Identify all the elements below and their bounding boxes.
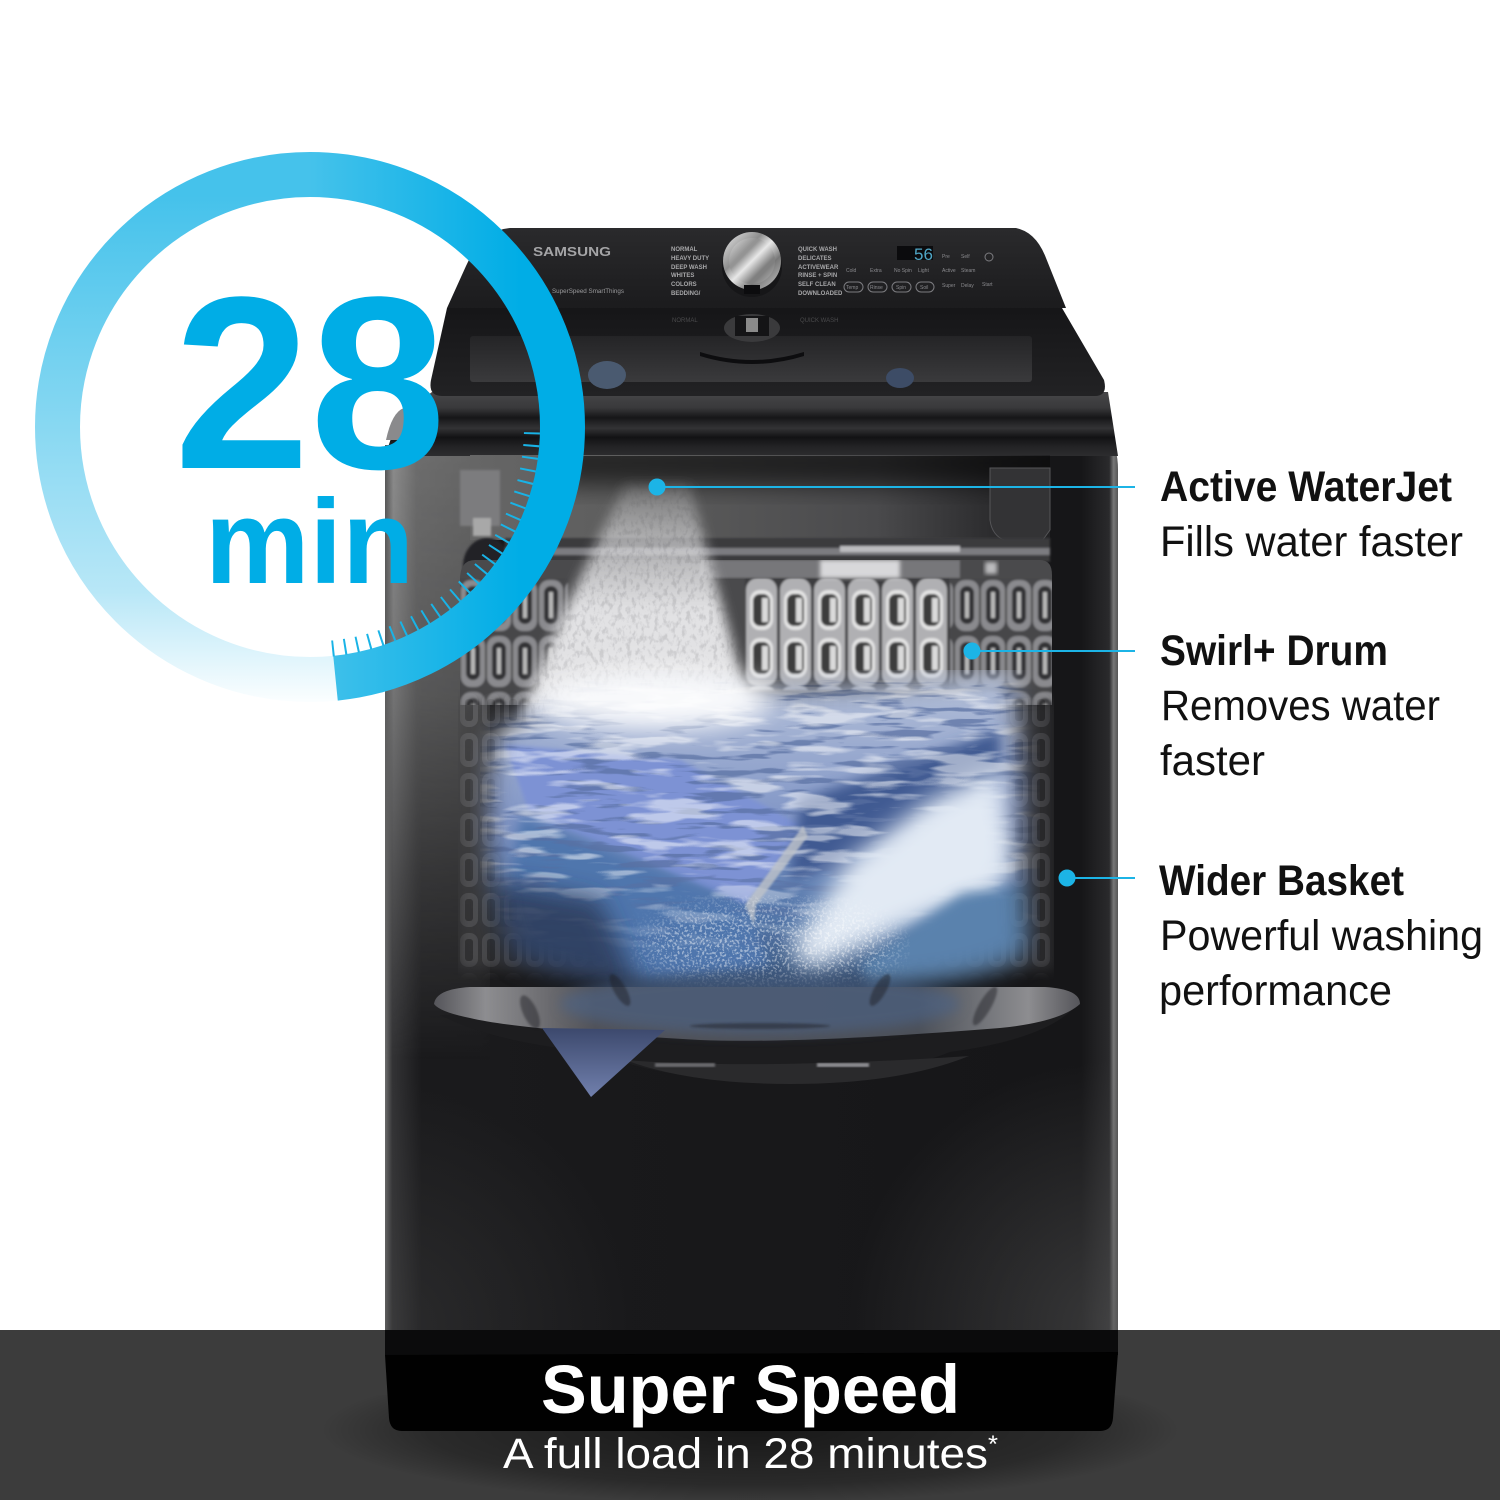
callout heading: Wider Basket — [1159, 857, 1404, 905]
surface highlight — [537, 670, 773, 730]
display: 56 — [914, 245, 933, 264]
option labels: Super — [942, 283, 956, 289]
pulsator vanes — [516, 971, 1001, 1031]
right cycle labels: DOWNLOADED — [798, 291, 843, 297]
option labels: Rinse — [870, 285, 883, 291]
right cycle labels: RINSE + SPIN — [798, 273, 837, 279]
drum rim — [505, 538, 1050, 562]
right cycle labels: ACTIVEWEAR — [798, 265, 839, 271]
option labels: Pre — [942, 254, 950, 260]
option labels: Temp — [846, 285, 858, 291]
water mass — [470, 670, 1040, 1000]
callout pointer — [648, 478, 1135, 496]
left cycle labels: BEDDING/ — [671, 291, 701, 297]
option labels: Steam — [961, 268, 975, 274]
option buttons — [844, 253, 993, 292]
washing machine — [385, 228, 1118, 1431]
drum wall lower — [458, 690, 1054, 980]
bowl centre water — [560, 974, 960, 1034]
right cycle labels — [798, 247, 843, 297]
right cycle labels: QUICK WASH — [798, 247, 837, 253]
timer number: 28 — [174, 246, 446, 521]
cloth hem edge — [745, 826, 808, 925]
callout: Swirl+ Drum — [964, 627, 1440, 785]
lower left shadow — [490, 880, 640, 990]
option labels: Spin — [896, 285, 906, 291]
option labels: Extra — [870, 268, 882, 274]
glass lid: NORMAL — [672, 318, 698, 324]
option labels: Cold — [846, 268, 857, 274]
washer bowl pulsator — [434, 971, 1080, 1084]
callout: Active WaterJet — [648, 463, 1463, 566]
callout body: performance — [1159, 967, 1392, 1015]
timer ring — [58, 174, 562, 680]
tick marks — [332, 427, 532, 648]
bright cloth right — [790, 770, 1015, 970]
grey left panel — [385, 445, 490, 1008]
bottom banner band — [0, 1330, 1500, 1500]
callout pointer — [964, 642, 1135, 660]
machine body — [385, 440, 1118, 1431]
blue cloth fold — [505, 745, 806, 905]
right cycle labels: SELF CLEAN — [798, 282, 836, 288]
left cycle labels: DEEP WASH — [671, 265, 707, 271]
option labels: Delay — [961, 283, 974, 289]
right bracket — [990, 468, 1050, 541]
left cycle labels — [671, 247, 709, 297]
right cycle labels: DELICATES — [798, 256, 832, 262]
water spray — [516, 481, 749, 724]
callout: Wider Basket — [1058, 857, 1483, 1015]
glass lid — [430, 308, 1105, 396]
left cycle labels: COLORS — [671, 282, 697, 288]
fading arc — [58, 174, 336, 680]
control console — [447, 228, 1066, 308]
ring highlights — [655, 1063, 715, 1067]
callout heading: Active WaterJet — [1160, 463, 1452, 511]
left cycle labels: NORMAL — [671, 247, 698, 253]
dial knob — [722, 232, 782, 297]
option labels: Start — [982, 282, 993, 288]
left bracket — [460, 470, 511, 594]
top band under lid — [385, 392, 1118, 456]
callout body — [1160, 682, 1440, 785]
callout body — [1159, 912, 1483, 1015]
glass lid: QUICK WASH — [800, 318, 838, 324]
sparkling foam — [630, 895, 910, 995]
option labels: Active — [942, 268, 956, 274]
feature label: SuperSpeed SmartThings — [552, 289, 624, 295]
bright window patches — [700, 560, 960, 578]
banner subtitle: A full load in 28 minutes — [503, 1430, 957, 1478]
drum perforated wall, top — [458, 560, 1058, 706]
brand name: SAMSUNG — [533, 244, 611, 259]
callout heading: Swirl+ Drum — [1160, 627, 1388, 675]
banner subtitle: * — [988, 1431, 998, 1458]
cavity back wall — [470, 455, 1050, 540]
left cycle labels: HEAVY DUTY — [671, 256, 709, 262]
option labels: Light — [918, 268, 929, 274]
fabric streaks — [480, 680, 1040, 970]
striped lower cloth — [500, 815, 770, 985]
lower right water — [860, 885, 1030, 995]
callout body: Fills water faster — [1160, 518, 1463, 566]
solid arc — [310, 174, 562, 678]
bowl rim — [434, 987, 1080, 1041]
callout body: Removes water — [1161, 682, 1440, 730]
back wall shading — [576, 456, 1050, 498]
interior cavity — [460, 455, 1050, 568]
lower bowl ring — [625, 1056, 969, 1084]
left cycle labels: WHITES — [671, 273, 694, 279]
option labels — [846, 254, 993, 291]
right dark band — [790, 730, 1000, 880]
hanging cloth tip — [542, 1028, 665, 1097]
timer unit: min — [205, 475, 414, 609]
option labels: No Spin — [894, 268, 912, 274]
bowl underside — [440, 1010, 1072, 1083]
swirling water and laundry — [470, 670, 1040, 1000]
callout body: faster — [1160, 737, 1265, 785]
callout pointer — [1058, 870, 1135, 886]
option labels: Self — [961, 254, 970, 260]
display — [897, 245, 933, 264]
left chrome edge — [386, 402, 432, 440]
option labels: Soil — [920, 285, 928, 291]
callout body: Powerful washing — [1160, 912, 1483, 960]
banner title: Super Speed — [541, 1351, 960, 1428]
